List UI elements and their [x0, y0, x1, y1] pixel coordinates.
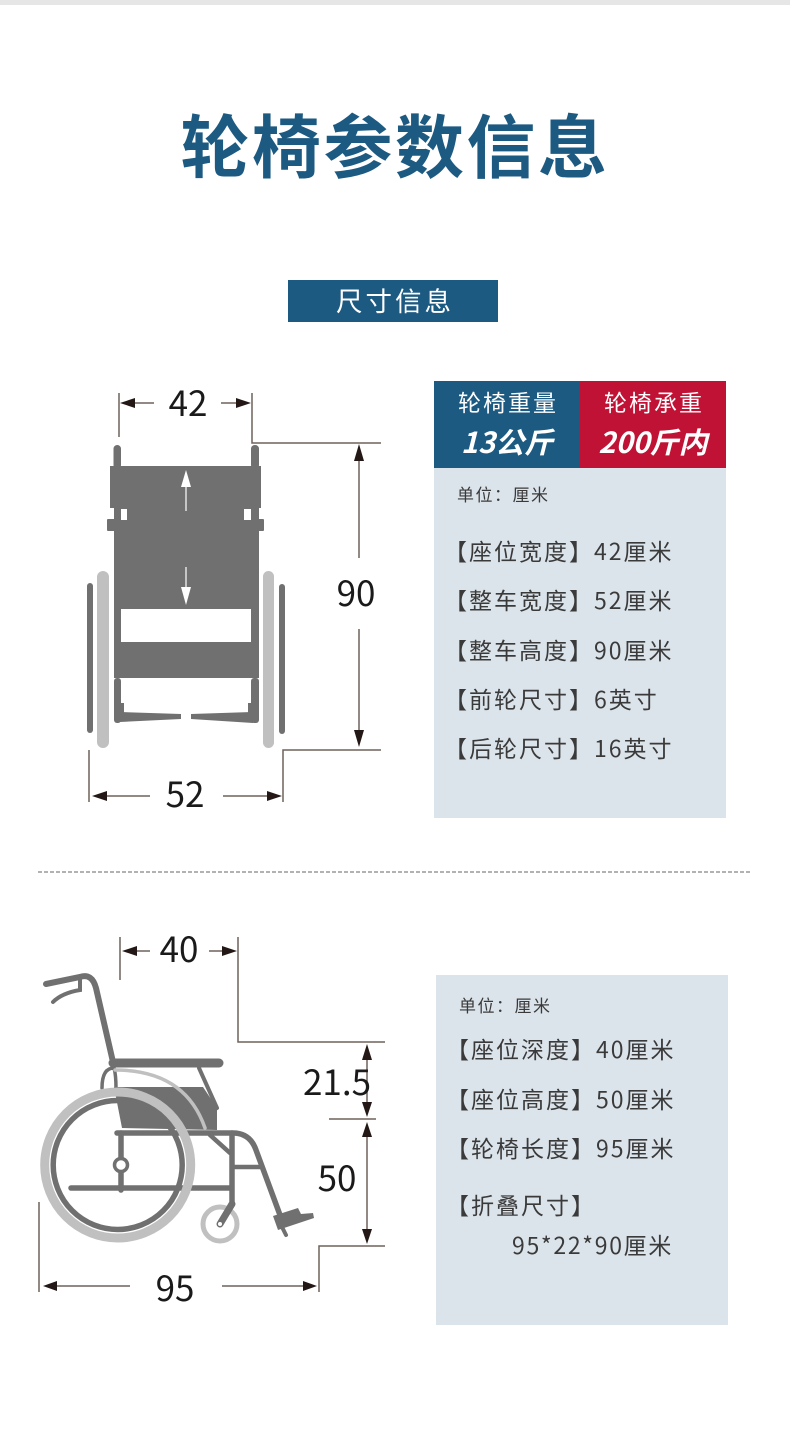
- top grey bar: [0, 0, 790, 5]
- dimension: overall height 90: 90: [337, 566, 375, 617]
- frame cutouts: [121, 509, 251, 703]
- dimension: seat depth 40: [120, 922, 385, 1042]
- spec: overall width: 【整车宽度】52厘米: [444, 582, 674, 616]
- illustration: wheelchair side view: [45, 976, 314, 1241]
- capacity value: 200斤内: [598, 420, 708, 462]
- badge: wheelchair weight: [434, 381, 580, 468]
- capacity label: 轮椅承重: [604, 384, 704, 418]
- dimension: seat depth 40: 40: [160, 922, 198, 973]
- weight label: 轮椅重量: [458, 384, 558, 418]
- brake lever: [53, 980, 80, 1002]
- panel: side view specifications: [436, 975, 728, 1325]
- chair frame and backrest: [107, 445, 264, 723]
- spec: seat depth: 【座位深度】40厘米: [446, 1031, 676, 1065]
- spec: folded size heading: 【折叠尺寸】: [446, 1187, 596, 1221]
- spec: folded size value: 95*22*90厘米: [512, 1227, 673, 1261]
- section heading: size information: [288, 280, 498, 322]
- dimension: seat height 50: [318, 1122, 372, 1244]
- dimension: seat width 42: 42: [169, 376, 207, 427]
- footplate: [273, 1208, 314, 1230]
- illustration: wheelchair front view: [87, 445, 285, 748]
- dimension: seat width 42: [119, 376, 381, 443]
- dimension: seat height 50: 50: [318, 1151, 356, 1202]
- rear wheels, front view: [87, 571, 285, 748]
- dimension: overall length 95: [39, 1202, 385, 1312]
- dimension: overall width 52: [89, 750, 381, 818]
- lower frame: [117, 1133, 280, 1215]
- seat upholstery: [114, 1087, 217, 1130]
- armrest: [113, 1058, 219, 1068]
- dimension: overall height 90: [337, 444, 375, 747]
- fender dark arc: [102, 1068, 116, 1088]
- rear hub: [114, 1158, 128, 1172]
- weight value: 13公斤: [461, 420, 553, 462]
- unit note: 单位：厘米: [457, 481, 550, 506]
- spec: rear wheel size: 【后轮尺寸】16英寸: [444, 730, 674, 764]
- fender light arc: [115, 1070, 205, 1128]
- rear wheel rim: [53, 1100, 182, 1230]
- dimension: overall length 95: 95: [156, 1261, 194, 1312]
- spec: overall height: 【整车高度】90厘米: [444, 632, 674, 666]
- spec: wheelchair length: 【轮椅长度】95厘米: [446, 1130, 676, 1164]
- section heading: size information: 尺寸信息: [336, 280, 454, 319]
- unit note: 单位：厘米: [459, 992, 552, 1017]
- white height arrows: [181, 470, 191, 605]
- caster fork: [220, 1204, 232, 1224]
- dimension: armrest height 21.5: 21.5: [303, 1055, 371, 1106]
- dimension: armrest height 21.5: [303, 1044, 376, 1119]
- caster wheel: [203, 1207, 237, 1241]
- rear wheel tire: [45, 1092, 191, 1238]
- title: 轮椅参数信息: [180, 92, 610, 192]
- panel: front view specifications: [434, 381, 726, 818]
- badge: load capacity: [580, 381, 726, 468]
- push handle and backrest tube: [46, 976, 113, 1062]
- dimension: overall width 52: 52: [166, 767, 204, 818]
- spec: front wheel size: 【前轮尺寸】6英寸: [444, 681, 659, 715]
- spec: seat width: 【座位宽度】42厘米: [444, 533, 674, 567]
- arm support: [199, 1068, 217, 1108]
- spec: seat height: 【座位高度】50厘米: [446, 1081, 676, 1115]
